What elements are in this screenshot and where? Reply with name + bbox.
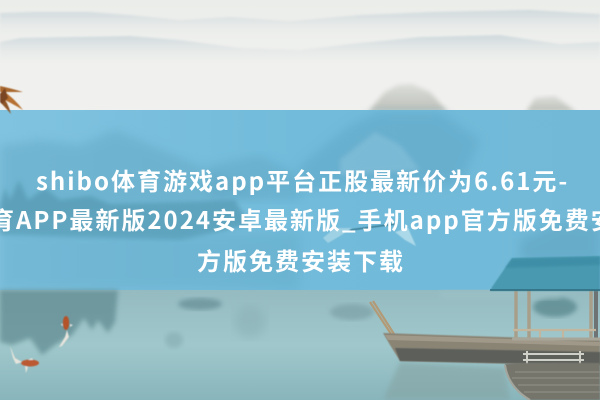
title line 1: shibo体育游戏app平台正股最新价为6.61元- bbox=[36, 162, 569, 197]
misty sky panel bbox=[0, 0, 600, 112]
thatched roof bbox=[490, 256, 600, 291]
bench bbox=[523, 351, 584, 364]
boat prow poles bbox=[370, 301, 394, 334]
boat with pavilion bbox=[370, 256, 600, 400]
tree line bbox=[0, 180, 250, 240]
pavilion railing bbox=[513, 330, 596, 338]
title line 3: 方版免费安装下载 bbox=[197, 242, 405, 277]
icon: koi fish lower bbox=[10, 346, 39, 373]
boat hull bbox=[383, 333, 600, 365]
blue title band bbox=[0, 110, 600, 290]
boat reflection bbox=[385, 362, 510, 400]
icon: cranes bbox=[323, 224, 416, 246]
pavilion posts bbox=[516, 288, 591, 338]
round deck bbox=[505, 363, 600, 400]
water panel bbox=[0, 290, 600, 400]
icon: koi fish upper bbox=[59, 316, 73, 347]
icon: leaves bbox=[0, 86, 23, 114]
